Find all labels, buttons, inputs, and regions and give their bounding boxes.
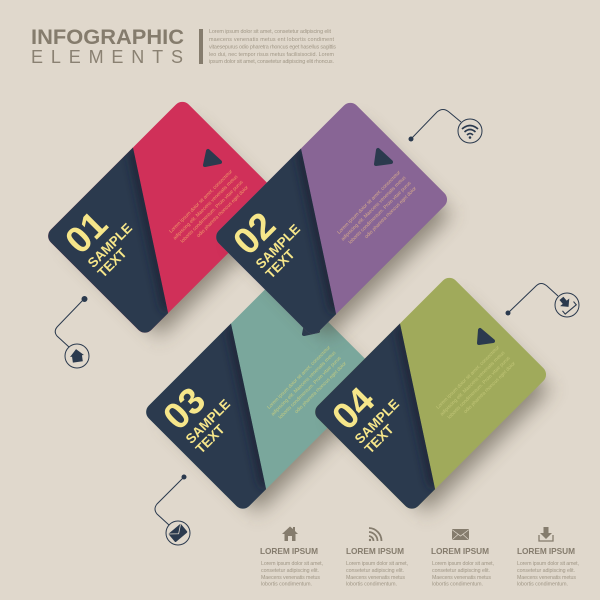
footer 3 text: lobortis condimentum. [432, 582, 483, 588]
icon: envelope [452, 529, 469, 540]
footer 1 text: Maecens venenatis metus [261, 575, 320, 581]
icon: rss [369, 528, 382, 541]
card 01 body text: Lorem ipsum dolor sit amet, consectetur [168, 169, 234, 235]
card 04 dark fold [315, 324, 435, 509]
card 02 body text: adipiscing elit. Maecens venenatis metus [340, 175, 408, 242]
card 02 body text: lobortis condimentum. Proin vitae purus [348, 180, 413, 245]
callout: download [506, 284, 579, 317]
header description: ipsum dolor sit amet, consetetur adipiscing elit rhoncus. [209, 59, 334, 65]
header description: Lorem ipsum dolor sit amet, consetetur adipiscing elit [209, 29, 332, 35]
card 03 [146, 290, 366, 520]
footer column 4 [517, 527, 579, 588]
footer 4 text: Maecens venenatis metus [517, 575, 576, 581]
footer 4 text [517, 561, 579, 588]
card 02 body text [335, 169, 418, 253]
card 04 number: 04 [324, 379, 383, 437]
footer 3 text [432, 561, 494, 588]
card 02 label: SAMPLE [253, 221, 303, 272]
card 03 face [142, 274, 381, 512]
card 01 body text: lobortis condimentum. Proin vitae purus [180, 179, 245, 244]
card 01 label: SAMPLE [85, 220, 135, 271]
card 04 body text: Lorem ipsum dolor sit amet, consectetur [435, 345, 501, 411]
header description: vitaesepurus odio pharetra rhoncus eget hasellus sagittis [209, 44, 336, 50]
card 03 body text: adipiscing elit. Maecens venenatis metus [270, 350, 338, 417]
card 04 [311, 274, 557, 520]
card 01 body text: adipiscing elit. Maecens venenatis metus [172, 174, 240, 241]
card 04 body text: odio pharetra rhoncus eget dolor [463, 360, 517, 415]
card 02 number: 02 [225, 204, 283, 262]
card 04 label: SAMPLE [352, 396, 402, 447]
callout: wifi [408, 110, 482, 143]
footer 3 title: LOREM IPSUM [431, 546, 489, 556]
card 03 body text: Lorem ipsum dolor sit amet, consectetur [266, 345, 332, 411]
footer 4 title: LOREM IPSUM [517, 546, 575, 556]
card 01 shadow [68, 121, 283, 336]
card 03 shadow [166, 297, 381, 512]
footer 2 title: LOREM IPSUM [346, 546, 404, 556]
card 04 body text: lobortis condimentum. Proin vitae purus [447, 355, 512, 420]
card 04 face [311, 274, 550, 512]
footer 2 text: Maecens venenatis metus [346, 575, 405, 581]
footer 3 text: Maecens venenatis metus [432, 575, 491, 581]
card 03 number: 03 [155, 379, 213, 437]
card 02 dark fold [216, 148, 336, 334]
card 03 body text: lobortis condimentum. Proin vitae purus [278, 355, 343, 420]
footer 3 text: consetetur adipiscing elit. [432, 568, 490, 574]
footer 3 text: Lorem ipsum dolor sit amet, [432, 561, 494, 567]
card 02 face [212, 99, 451, 337]
subtitle: elements: ELEMENTS [31, 47, 183, 67]
callout: envelope [155, 474, 190, 545]
footer 1 text: lobortis condimentum. [261, 582, 312, 588]
card 04 body text: adipiscing elit. Maecens venenatis metus [439, 350, 507, 417]
footer 4 text: Lorem ipsum dolor sit amet, [517, 561, 579, 567]
card 04 body text [434, 344, 517, 428]
card 04 shadow [335, 297, 550, 512]
card 03 body text [265, 344, 348, 428]
card 01 body text [167, 168, 250, 252]
card 02 shadow [236, 122, 451, 337]
header divider bar [199, 29, 203, 64]
card 01 number: 01 [57, 203, 115, 261]
card 02 label: TEXT [263, 246, 298, 282]
footer 2 text: Lorem ipsum dolor sit amet, [346, 561, 408, 567]
footer 1 text [261, 561, 323, 588]
footer 1 title: LOREM IPSUM [260, 546, 318, 556]
footer 2 text: lobortis condimentum. [346, 582, 397, 588]
card 03 triangle [304, 324, 318, 334]
card 01 dark fold [48, 148, 168, 333]
card 01 label: TEXT [95, 245, 130, 281]
header [31, 26, 336, 67]
card 02 body text: odio pharetra rhoncus eget dolor [364, 185, 418, 240]
footer 4 text: lobortis condimentum. [517, 582, 568, 588]
footer column 1 [260, 526, 323, 588]
card 02 [212, 99, 458, 345]
card 01 triangle [205, 151, 220, 165]
footer 4 text: consetetur adipiscing elit. [517, 568, 575, 574]
icon: download [539, 527, 553, 541]
card 04 label: TEXT [362, 421, 397, 457]
header description: leo dui, nec tempor risus metus facilisisociid. Lorem [209, 52, 334, 58]
footer 1 text: Lorem ipsum dolor sit amet, [261, 561, 323, 567]
callout: home [55, 296, 89, 368]
footer 2 text [346, 561, 408, 588]
icon: home [282, 526, 298, 541]
footer column 3 [431, 529, 494, 588]
card 04 triangle [479, 330, 493, 343]
card 03 body text: odio pharetra rhoncus eget dolor [294, 360, 348, 415]
card 03 label: SAMPLE [183, 396, 233, 447]
footer 2 text: consetetur adipiscing elit. [346, 568, 404, 574]
header description: maecens venenatis metus ent lobortis condiment [209, 37, 334, 43]
card 01 body text: odio pharetra rhoncus eget dolor [196, 184, 250, 239]
title: infographic: INFOGRAPHIC [31, 26, 184, 49]
footer column 2 [346, 528, 408, 588]
card 03 dark fold [146, 324, 266, 509]
footer 1 text: consetetur adipiscing elit. [261, 568, 319, 574]
card 01 face [44, 98, 283, 336]
card 02 body text: Lorem ipsum dolor sit amet, consectetur [336, 170, 402, 236]
card 01 [48, 102, 268, 344]
header description [209, 29, 336, 65]
card 02 triangle [376, 150, 391, 164]
card 03 label: TEXT [193, 421, 228, 457]
